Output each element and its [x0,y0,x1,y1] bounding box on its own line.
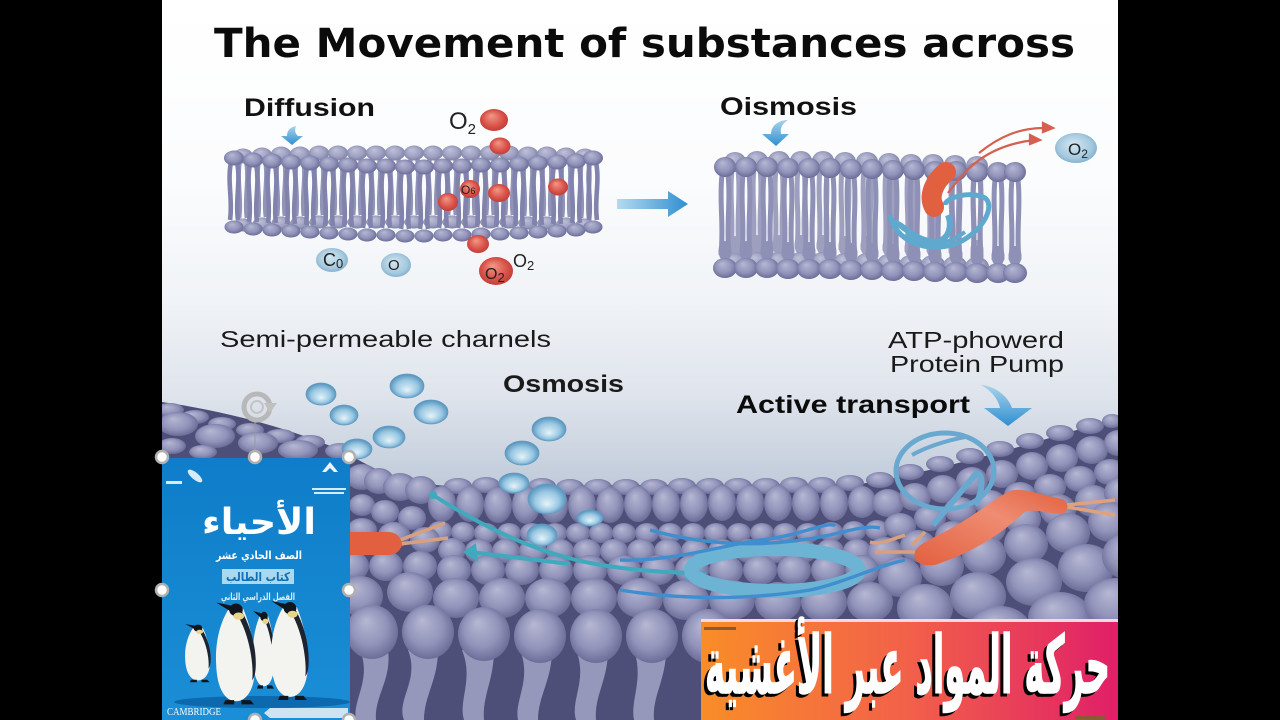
protein: orange rod left [345,523,448,555]
title: The Movement of substances across [214,21,1075,67]
slide background [162,0,1118,720]
molecule labels: diffusion: O [513,251,527,271]
molecule labels: diffusion: 2 [468,121,476,138]
panel: oismosis [713,93,1097,283]
molecule labels: diffusion: C [323,250,336,270]
cover grade: الصف الحادي عشر [215,549,302,562]
label: active transport: Active transport [736,391,971,419]
protein: teal channel arrows [429,491,708,581]
cover logos [166,462,346,494]
arrows: oxygen exit [948,123,1053,193]
molecule: O2 exit [1055,133,1097,163]
molecule: O2 exit: 2 [1081,147,1088,161]
cover title: الأحياء [202,499,316,543]
selection handles [156,422,355,720]
molecule labels: diffusion: O [485,266,497,283]
molecule labels: diffusion: 0 [336,256,343,271]
banner: arabic caption [701,617,1118,720]
arrow: diffusion to osmosis [617,191,688,217]
protein: blue coil [890,195,989,247]
cover publisher: CAMBRIDGE [167,706,221,718]
membrane: large bilayer [156,402,1158,720]
icon: oismosis arrow [762,120,789,146]
membrane: oismosis lipid bilayer [713,151,1027,283]
label: ATP pump: ATP-phowerd [888,327,1064,353]
labels: bottom diagram [220,326,1064,419]
protein: coil above pump [896,433,994,525]
panel: diffusion [224,94,603,285]
droplets: water molecules [306,374,603,546]
label: osmosis: Osmosis [503,371,624,398]
molecule: O2 exit: O [1068,140,1081,159]
icon: rotate handle [244,394,277,420]
cover penguins [174,601,350,708]
protein: blue ring pump [620,525,905,598]
molecule labels: diffusion [323,108,534,285]
protein: orange rod right [870,490,1115,565]
molecule labels: diffusion: 2 [497,270,505,285]
membrane: diffusion lipid bilayer [224,146,603,242]
cover semester: الفصل الدراسي الثاني [221,592,295,603]
cover publisher [167,706,348,718]
molecule labels: diffusion: 2 [527,258,534,273]
label: protein pump: Protein Pump [890,351,1064,377]
molecule labels: diffusion: O [449,108,468,135]
heading: diffusion: Diffusion [244,94,375,122]
oxygen molecules: diffusion [316,109,568,285]
heading: oismosis: Oismosis [720,93,857,121]
cover student book badge: كتاب الطالب [226,570,290,584]
molecule labels: diffusion: O [388,257,400,274]
molecule labels: diffusion: O6 [461,183,475,197]
icon: diffusion arrow [281,126,303,145]
label: semi-permeable channels: Semi-permeable charnels [220,326,551,352]
book cover [162,458,350,720]
protein: orange carrier [932,172,946,207]
icon: active transport arrow [981,385,1032,426]
